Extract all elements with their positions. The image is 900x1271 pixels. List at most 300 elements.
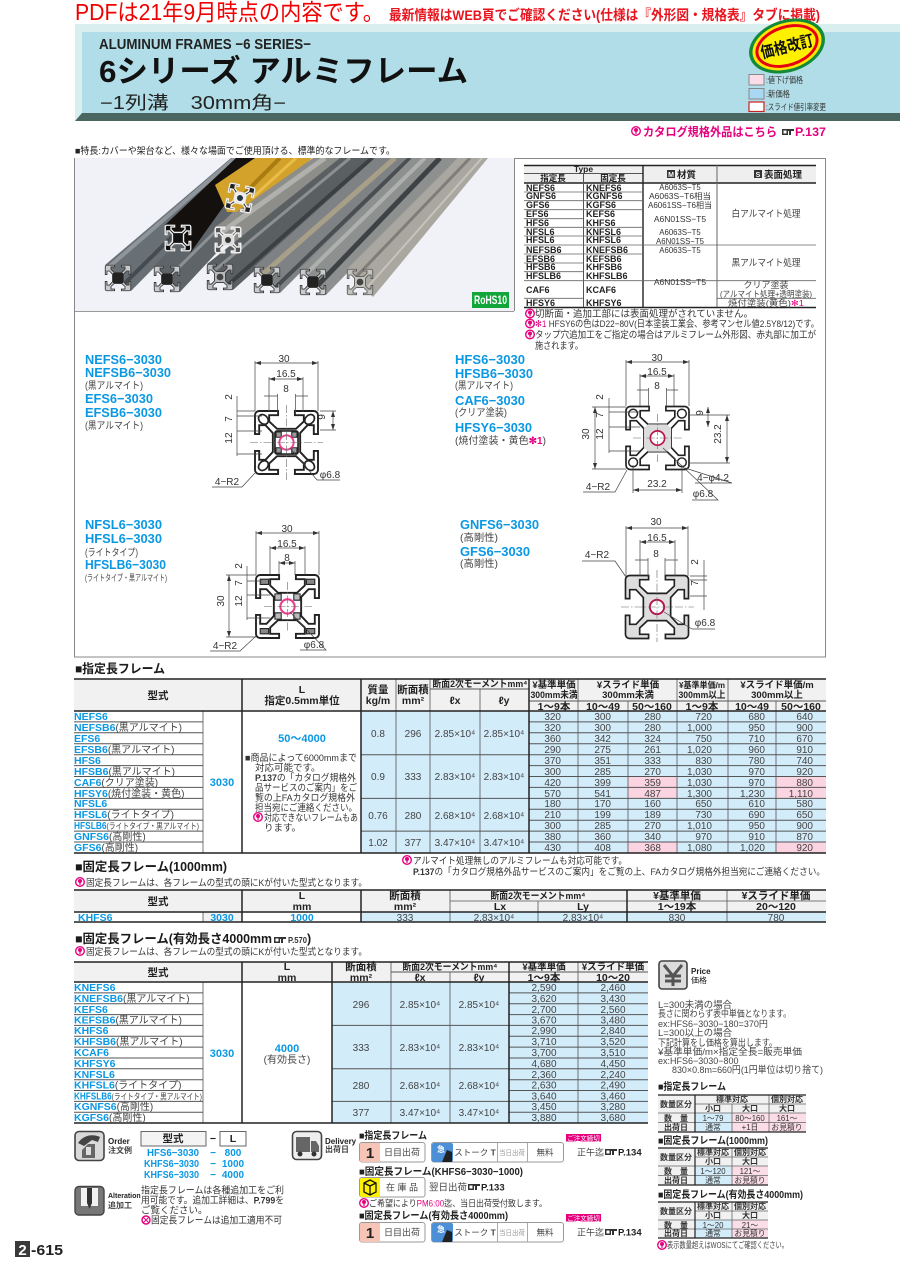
price values: 300 — [544, 767, 561, 778]
material and surface table: NEFS6 — [526, 183, 555, 193]
price legend: :スライド値引率変更 — [766, 102, 826, 112]
table: fixed length 1000mm: 333 — [397, 913, 414, 924]
delivery: fixed 4000mm: ■固定長フレーム(有効長さ4000mm) — [359, 1209, 508, 1222]
order example: 800 — [225, 1148, 242, 1159]
price values: 3,620 — [531, 994, 557, 1005]
mini table: specified length: 数量区分 — [660, 1099, 692, 1109]
delivery: fixed 4000mm — [359, 1209, 642, 1242]
section values: 280 — [353, 1081, 370, 1092]
model names: HFS6 group: HFS6−3030 — [455, 352, 525, 367]
price values: 199 — [594, 810, 611, 821]
price values: 950 — [748, 723, 765, 734]
model names: GNFS6 group — [460, 517, 539, 570]
page number: -615 — [31, 1243, 63, 1259]
alteration text — [141, 1184, 284, 1226]
drawing: NFSL6 cross section: 30 — [281, 524, 293, 535]
alteration text: 用可能です。追加工詳細は、P.799を — [141, 1194, 284, 1206]
price values: 2,840 — [600, 1026, 626, 1037]
model names: NFSL6 group: HFSLB6−3030 — [85, 557, 166, 572]
delivery: fixed 4000mm: 当日出荷 — [499, 1228, 525, 1237]
delivery: specified length: ストーク T — [454, 1148, 497, 1158]
badge: price revision: 価格改訂 — [759, 31, 816, 62]
order example: − — [210, 1170, 216, 1181]
price explanation: ex:HFS6−3030−800 — [658, 1056, 739, 1066]
mini heading: fixed 4000mm: ■固定長フレーム(有効長さ4000mm) — [658, 1188, 803, 1201]
table: fixed length 4000mm: 3030 — [210, 1048, 234, 1060]
model names: NEFS6 group — [85, 352, 171, 432]
price values: 380 — [544, 832, 561, 843]
note under specified table: アルマイト処理無しのアルミフレームも対応可能です。 — [413, 855, 627, 867]
frame border — [74, 158, 826, 657]
mini table: specified length: 大口 — [742, 1103, 758, 1113]
table: fixed length 4000mm: 断面積 — [345, 960, 377, 973]
alteration text: 指定長フレームは各種追加工をご利 — [141, 1184, 284, 1196]
price legend: :値下げ価格 — [766, 75, 803, 85]
heading: specified length frames: ■指定長フレーム — [75, 661, 165, 676]
drawing: HFS6 cross section — [581, 353, 732, 500]
model name column: KHFSL6(ライトタイプ) — [74, 1080, 182, 1092]
note in length cell: ■商品によって6000mmまで — [245, 752, 357, 764]
drawing: HFS6 cross section: 23.2 — [713, 424, 724, 444]
order example: − — [210, 1133, 216, 1145]
model name column: KNEFS6 — [74, 982, 116, 994]
model name column: KGFS6(高剛性) — [74, 1111, 146, 1124]
drawing: NFSL6 cross section: 12 — [234, 595, 245, 607]
price values: 900 — [796, 821, 813, 832]
price values: 1,010 — [687, 821, 712, 832]
table: specified length frames: ¥スライド単価 — [597, 679, 660, 691]
order example — [141, 1132, 246, 1181]
section values: 296 — [405, 729, 422, 740]
delivery: fixed 4000mm: 正午迄 — [577, 1226, 604, 1238]
order example: 1000 — [222, 1159, 245, 1170]
model names: HFS6 group: CAF6−3030 — [455, 393, 525, 408]
price values: 210 — [544, 810, 561, 821]
model names: NFSL6 group — [85, 517, 167, 583]
price values: 280 — [644, 712, 661, 723]
mini table: specified length: 標準対応 — [716, 1094, 748, 1104]
model names: HFS6 group: (クリア塗装) — [455, 406, 507, 419]
mini table: fixed 4000mm: 通常 — [705, 1228, 721, 1238]
material and surface table: GNFS6 — [526, 191, 556, 201]
material and surface table: A6063S−T5 — [659, 228, 701, 237]
price explanation: 下記計算をし価格を算出します。 — [658, 1037, 777, 1049]
mini table: specified length: 出荷日 — [664, 1122, 688, 1132]
heading: fixed length 4000mm — [75, 931, 367, 958]
icon: delivery: Delivery — [325, 1137, 357, 1146]
price values: 1,030 — [687, 778, 712, 789]
price values — [531, 983, 626, 1124]
material and surface table: 固定長 — [600, 173, 626, 183]
mini table: specified length: 80〜160 — [735, 1114, 765, 1123]
section values: 2.68×10⁴ — [400, 1081, 440, 1092]
mini table: specified length: 個別対応 — [771, 1094, 803, 1104]
price values: 408 — [594, 843, 611, 854]
section values — [368, 729, 524, 849]
note in length cell: 担当宛にご連絡ください。 — [255, 802, 357, 814]
price values: 960 — [748, 745, 765, 756]
mini table: fixed 4000mm: 数量区分 — [660, 1206, 692, 1216]
price values: 690 — [748, 810, 765, 821]
mini table: fixed 1000mm: 数量区分 — [660, 1152, 692, 1162]
order example: KHFS6−3030 — [144, 1159, 199, 1170]
heading: fixed length 4000mm: P.570 — [288, 935, 307, 945]
drawing: NEFS6 cross section: 7 — [224, 416, 235, 422]
model name column: HFSB6(黒アルマイト) — [74, 766, 175, 778]
section values: 2.85×10⁴ — [459, 1000, 499, 1011]
drawing: NFSL6 cross section: 30 — [216, 595, 227, 607]
model names: NFSL6 group: (ライトタイプ・黒アルマイト) — [85, 573, 167, 583]
price values: 2,490 — [600, 1080, 626, 1092]
material and surface table: A6063S−T5 — [659, 246, 701, 255]
table: fixed length 1000mm: 1〜19本 — [658, 900, 697, 913]
mini table: fixed 4000mm: 数 量 — [664, 1220, 688, 1230]
table: specified length frames: 300mm以上 — [751, 689, 803, 701]
section values: 2.85×10⁴ — [400, 1000, 440, 1011]
price values: 3,680 — [600, 1113, 626, 1124]
material and surface table: A6061SS−T6相当 — [648, 200, 712, 210]
price values: 541 — [594, 789, 611, 800]
order example: KHFS6−3030 — [144, 1170, 199, 1181]
price values: 3,700 — [531, 1048, 557, 1059]
mini table: specified length: 161〜 — [777, 1114, 798, 1123]
icon: order: 注文例 — [108, 1145, 132, 1155]
heading: fixed length 4000mm: ) — [307, 932, 311, 946]
drawing: NEFS6 cross section: 2 — [224, 394, 235, 400]
material and surface table — [514, 158, 816, 311]
icon: delivery: 出荷日 — [325, 1144, 349, 1154]
price values: 1,020 — [687, 745, 712, 756]
material and surface table: 白アルマイト処理 — [732, 208, 801, 220]
price values: 3,880 — [531, 1113, 557, 1124]
price values: 710 — [748, 734, 765, 745]
order example: 4000 — [222, 1170, 245, 1181]
model name column: CAF6(クリア塗装) — [74, 776, 158, 789]
section values: 3.47×10⁴ — [400, 1108, 440, 1119]
model name column — [74, 982, 202, 1124]
material and surface table: KNEFSB6 — [586, 245, 628, 255]
mini table: fixed 1000mm: 小口 — [705, 1156, 721, 1166]
icon: order — [75, 1132, 132, 1160]
drawing: HFS6 cross section: 7 — [595, 412, 606, 418]
delivery: fixed 1000mm: ご希望によりPM6:00迄、当日出荷受付致します。 — [369, 1198, 547, 1208]
drawing: NFSL6 cross section: φ6.8 — [304, 640, 325, 651]
price values: 970 — [695, 832, 712, 843]
material and surface table: NEFSB6 — [526, 245, 562, 255]
material and surface table: HFS6 — [526, 218, 549, 228]
mini table: specified length: お見積り — [771, 1122, 803, 1132]
icon: price: Price — [691, 967, 711, 976]
note under specified table — [403, 855, 825, 878]
note under specified table: P.137の「カタログ規格外品サービスのご案内」をご覧の上、FAカタログ規格外担当宛にご連絡ください。 — [413, 866, 825, 878]
price values: 3,710 — [531, 1037, 557, 1048]
price values: 950 — [748, 821, 765, 832]
mini table: specified length: +1日 — [742, 1123, 758, 1132]
drawing: NEFS6 cross section: 16.5 — [276, 369, 296, 380]
table: fixed length 1000mm: Ly — [577, 901, 589, 913]
price values: 340 — [644, 832, 661, 843]
catalog link — [632, 124, 826, 139]
model names: NEFS6 group: (黒アルマイト) — [85, 380, 143, 392]
model name column: NFSL6 — [74, 798, 107, 810]
mini table: fixed 1000mm: 大口 — [742, 1156, 758, 1166]
table: fixed length 1000mm — [74, 889, 826, 924]
delivery: fixed 4000mm: 急 — [437, 1224, 445, 1234]
order example: HFS6−3030 — [147, 1148, 199, 1159]
order example: − — [210, 1159, 216, 1170]
delivery: specified length — [359, 1129, 642, 1162]
table: specified length frames: L — [299, 684, 306, 696]
drawing: HFS6 cross section: 8 — [654, 381, 660, 392]
section values: 2.83×10⁴ — [459, 1043, 499, 1054]
heading: fixed length 4000mm: 固定長フレームは、各フレームの型式の頭にKが付いた型式となります。 — [86, 946, 367, 958]
model names: NEFS6 group: NEFS6−3030 — [85, 352, 162, 367]
section values: 2.68×10⁴ — [484, 811, 524, 822]
delivery: specified length: 1 — [366, 1145, 374, 1162]
mini table: fixed 4000mm: 出荷日 — [664, 1228, 688, 1238]
price values: 580 — [796, 799, 813, 810]
drawing: GNFS6 cross section: 8 — [653, 549, 659, 560]
delivery: specified length: P.134 — [618, 1148, 642, 1158]
table notes: 切断面・追加工部には表面処理がされていません。 — [535, 308, 753, 320]
price values: 1,110 — [789, 789, 813, 800]
drawing: HFS6 cross section: 23.2 — [647, 479, 667, 490]
table: fixed length 1000mm: 2.83×10⁴ — [474, 913, 514, 924]
delivery: fixed 4000mm: ストーク T — [454, 1228, 497, 1238]
delivery: specified length: 急 — [437, 1144, 445, 1154]
drawing: NFSL6 cross section: 16.5 — [277, 539, 297, 550]
material and surface table: KEFS6 — [586, 209, 615, 219]
table: specified length frames: mm² — [402, 695, 425, 707]
price values: 2,460 — [600, 983, 626, 994]
material and surface table: KNFSL6 — [586, 227, 621, 237]
price values: 333 — [644, 756, 661, 767]
price values: 670 — [796, 734, 813, 745]
mini table: specified length — [658, 1094, 806, 1132]
material and surface table: A6063S−T6相当 — [649, 191, 711, 201]
price values: 2,990 — [531, 1026, 557, 1037]
note in length cell — [245, 752, 358, 834]
price values: 720 — [695, 712, 712, 723]
table: fixed length 1000mm: L — [299, 890, 306, 902]
model name column: KNFSL6 — [74, 1069, 115, 1081]
price values: 2,590 — [531, 983, 557, 994]
drawing: GNFS6 cross section: 16.5 — [647, 533, 667, 544]
price values: 300 — [594, 723, 611, 734]
table: specified length frames: 断面積 — [397, 683, 429, 696]
table: specified length frames: 300mm以上 — [678, 689, 726, 701]
drawing: HFS6 cross section: 4−φ4.2 — [697, 473, 729, 484]
table: specified length frames: 指定0.5mm単位 — [264, 694, 340, 707]
price values: 180 — [544, 799, 561, 810]
price values: 1,000 — [687, 723, 712, 734]
feature text: ■特長:カバーや架台など、様々な場面でご使用頂ける、標準的なフレームです。 — [75, 145, 395, 157]
drawing: GNFS6 cross section — [582, 517, 716, 642]
material and surface table: NFSL6 — [526, 227, 555, 237]
price values: 650 — [796, 810, 813, 821]
section values: 377 — [405, 838, 422, 849]
material and surface table: KHFS6 — [586, 218, 616, 228]
drawing: HFS6 cross section: 2 — [595, 394, 606, 400]
table: specified length frames: 300mm未満 — [530, 689, 578, 701]
price values: 189 — [644, 810, 661, 821]
material and surface table: KHFSB6 — [586, 262, 622, 272]
price values: 270 — [644, 821, 661, 832]
price values: 4,450 — [600, 1059, 626, 1070]
table: specified length frames: kg/m — [366, 695, 390, 707]
price values: 830 — [695, 756, 712, 767]
delivery: specified length: ご注文締切 — [567, 1134, 600, 1142]
model names: NFSL6 group: HFSL6−3030 — [85, 531, 162, 546]
model name column: NEFSB6(黒アルマイト) — [74, 722, 182, 734]
price values: 368 — [644, 843, 661, 854]
price values: 1,080 — [687, 843, 712, 854]
drawing: NEFS6 cross section: 12 — [224, 432, 235, 444]
heading: fixed length 4000mm: ■固定長フレーム(有効長さ4000mm — [75, 931, 272, 946]
price values: 2,700 — [531, 1005, 557, 1016]
price values: 970 — [748, 767, 765, 778]
price values: 420 — [544, 778, 561, 789]
material and surface table: KCAF6 — [586, 285, 616, 295]
note in length cell: P.137の「カタログ規格外 — [255, 772, 356, 784]
model name column: KHFSB6(黒アルマイト) — [74, 1036, 183, 1048]
model name column: KEFS6 — [74, 1004, 108, 1016]
table: specified length frames: 10〜49 — [586, 701, 620, 713]
mini table: specified length: 1〜79 — [703, 1114, 723, 1123]
model names: GNFS6 group: (高剛性) — [460, 557, 498, 570]
price explanation: ex:HFS6−3030−180=370円 — [658, 1019, 768, 1029]
note in length cell: 品サービスのご案内」をご — [255, 782, 357, 794]
model names: NEFS6 group: (黒アルマイト) — [85, 420, 143, 432]
material and surface table: KEFSB6 — [586, 254, 622, 264]
mini table: fixed 1000mm: 標準対応 — [697, 1147, 729, 1157]
RoHS badge — [472, 292, 509, 308]
icon: delivery — [292, 1132, 357, 1160]
drawing: NEFS6 cross section: φ6.8 — [320, 470, 341, 481]
material and surface table: A6N01SS−T5 — [654, 214, 706, 224]
model name column: HFS6 — [74, 755, 101, 767]
price values: 740 — [796, 756, 813, 767]
price values: 900 — [796, 723, 813, 734]
material and surface table: KNEFS6 — [586, 183, 622, 193]
heading: fixed length 1000mm: ■固定長フレーム(1000mm) — [75, 860, 227, 874]
price values: 1,020 — [740, 843, 765, 854]
material and surface table: Type — [574, 164, 593, 174]
price values — [544, 712, 813, 854]
drawing: NFSL6 cross section: 4−R2 — [213, 641, 238, 652]
delivery: fixed 1000mm — [359, 1166, 547, 1208]
mini table: fixed 4000mm: 小口 — [705, 1210, 721, 1220]
table: fixed length 1000mm: 20〜120 — [756, 901, 796, 913]
table: specified length frames: 50〜160 — [781, 701, 821, 713]
price values: 3,430 — [600, 994, 626, 1005]
price values: 880 — [796, 778, 813, 789]
table: fixed length 1000mm: 1000 — [290, 912, 314, 924]
table: specified length frames: 型式 — [148, 689, 169, 702]
section values: 2.68×10⁴ — [435, 811, 475, 822]
price values: 640 — [796, 712, 813, 723]
price values: 320 — [544, 723, 561, 734]
table: specified length frames: ℓy — [499, 695, 510, 707]
table: fixed length 1000mm: 2.83×10⁴ — [563, 913, 603, 924]
model names: NEFS6 group: EFS6−3030 — [85, 391, 153, 406]
table: specified length frames: 3030 — [210, 777, 234, 789]
table: fixed length 4000mm: mm² — [350, 972, 373, 984]
model name column: HFSLB6(ライトタイプ・黒アルマイト) — [74, 820, 199, 832]
table: fixed length 4000mm: 10〜20 — [596, 972, 630, 984]
WOS note: 表示数量超えはWOSにてご確認ください。 — [667, 1240, 788, 1250]
material and surface table: KGNFS6 — [586, 191, 623, 201]
table: fixed length 1000mm: mm — [293, 901, 311, 913]
table: fixed length 1000mm: mm² — [394, 901, 417, 913]
price values: 399 — [594, 778, 611, 789]
table: fixed length 1000mm: 型式 — [148, 895, 169, 908]
price explanation — [657, 999, 823, 1076]
drawing: GNFS6 cross section: 7 — [690, 580, 701, 586]
table: specified length frames — [74, 678, 826, 854]
model name column: GFS6(高剛性) — [74, 841, 138, 854]
model names: NFSL6 group: (ライトタイプ) — [85, 547, 138, 559]
table: specified length frames: ¥スライド単価/m — [740, 679, 814, 691]
note in length cell: 対応できないフレームもあ — [264, 812, 358, 824]
price values: 730 — [695, 810, 712, 821]
table: fixed length 4000mm: ¥スライド単価 — [582, 961, 645, 973]
model name column: KGNFS6(高剛性) — [74, 1100, 153, 1113]
material and surface table: KHFSLB6 — [586, 271, 628, 281]
section values: 280 — [405, 811, 422, 822]
section values: 2.68×10⁴ — [459, 1081, 499, 1092]
section values: 0.9 — [371, 772, 385, 783]
model names: HFS6 group — [455, 352, 546, 447]
price values: 2,360 — [531, 1070, 557, 1081]
price values: 3,450 — [531, 1102, 557, 1113]
model name column: GNFS6(高剛性) — [74, 830, 146, 843]
mini table: fixed 1000mm: 通常 — [705, 1175, 721, 1185]
section values: 2.85×10⁴ — [435, 729, 475, 740]
price legend — [749, 74, 826, 112]
price values: 170 — [594, 799, 611, 810]
page number — [15, 1241, 63, 1259]
mini table: fixed 1000mm: 1〜120 — [700, 1167, 726, 1176]
mini table: fixed 1000mm: 個別対応 — [734, 1147, 766, 1157]
table: fixed length 4000mm: 4000 — [275, 1043, 299, 1055]
alteration text: 固定長フレームは追加工適用不可 — [151, 1214, 282, 1226]
table: fixed length 4000mm: 1〜9本 — [528, 971, 561, 984]
table: fixed length 4000mm — [74, 960, 648, 1124]
model names: HFS6 group: (黒アルマイト) — [455, 380, 513, 392]
price values: 1,230 — [740, 789, 765, 800]
material and surface table: クリア塗装 — [743, 279, 789, 290]
section values: 2.85×10⁴ — [484, 729, 524, 740]
price values: 285 — [594, 821, 611, 832]
price explanation: L=300以上の場合 — [658, 1027, 733, 1039]
price values: 610 — [748, 799, 765, 810]
price values: 4,680 — [531, 1059, 557, 1070]
table: fixed length 4000mm: ℓy — [474, 972, 485, 984]
table: fixed length 4000mm: 断面2次モーメントmm⁴ — [402, 961, 498, 973]
icon: alteration: Alteration — [108, 1193, 141, 1200]
table notes — [526, 308, 819, 352]
catalog link: カタログ規格外品はこちら — [643, 124, 777, 139]
catalog link: P.137 — [795, 125, 826, 139]
notice line — [75, 0, 820, 25]
model names: HFS6 group: HFSB6−3030 — [455, 366, 533, 381]
model names: NEFS6 group: EFSB6−3030 — [85, 405, 162, 420]
material and surface table: HFSLB6 — [526, 271, 561, 281]
model names: HFS6 group: (焼付塗装・黄色✻1) — [455, 434, 546, 447]
model name column — [74, 711, 199, 854]
delivery: fixed 1000mm: 翌日出荷 — [429, 1182, 468, 1194]
